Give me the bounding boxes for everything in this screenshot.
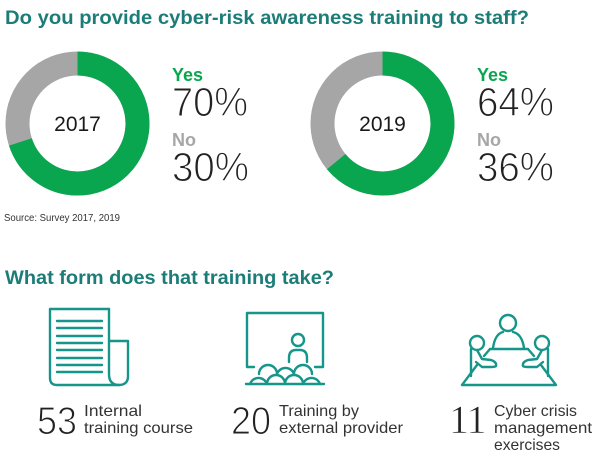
legend 2019: 64% <box>477 79 554 125</box>
heading: training form: What form does that training take? <box>5 267 334 289</box>
donut chart 2017: 2017 <box>54 113 101 136</box>
legend 2017: 30% <box>172 144 249 190</box>
donut chart 2019: 2019 <box>359 113 406 136</box>
stat: cyber crisis management exercises <box>449 397 593 454</box>
legend 2017 <box>172 65 249 190</box>
legend 2019: No <box>477 130 501 150</box>
source note: Source: Survey 2017, 2019 <box>4 213 120 224</box>
stat: internal training course: 53 <box>37 400 77 443</box>
icon: presenter and audience <box>246 313 324 384</box>
stat: cyber crisis management exercises: 11 <box>449 397 486 442</box>
legend 2017: 70% <box>172 79 248 125</box>
stat: internal training course <box>37 400 193 443</box>
stat: training by external provider: 20 <box>231 400 271 443</box>
icon: meeting around a table <box>462 315 556 385</box>
legend 2019: Yes <box>477 65 508 85</box>
stat: training by external provider <box>231 400 404 443</box>
donut chart 2017 <box>18 64 138 184</box>
donut chart 2019 <box>322 64 442 184</box>
stat: training by external provider: Training by <box>279 403 359 420</box>
stat: cyber crisis management exercises: exercises <box>494 437 560 454</box>
legend 2017: Yes <box>172 65 203 85</box>
stat: training by external provider: external provider <box>279 420 404 437</box>
stat: internal training course: training course <box>84 420 193 437</box>
heading: cyber-risk training question: Do you provide cyber-risk awareness training to staff? <box>5 7 529 29</box>
stat: cyber crisis management exercises: Cyber crisis <box>494 403 577 420</box>
icon: document <box>50 309 128 385</box>
stat: cyber crisis management exercises: management <box>494 420 593 437</box>
legend 2019 <box>477 65 554 190</box>
stat: internal training course: Internal <box>84 403 142 420</box>
legend 2019: 36% <box>477 144 554 190</box>
legend 2017: No <box>172 130 196 150</box>
